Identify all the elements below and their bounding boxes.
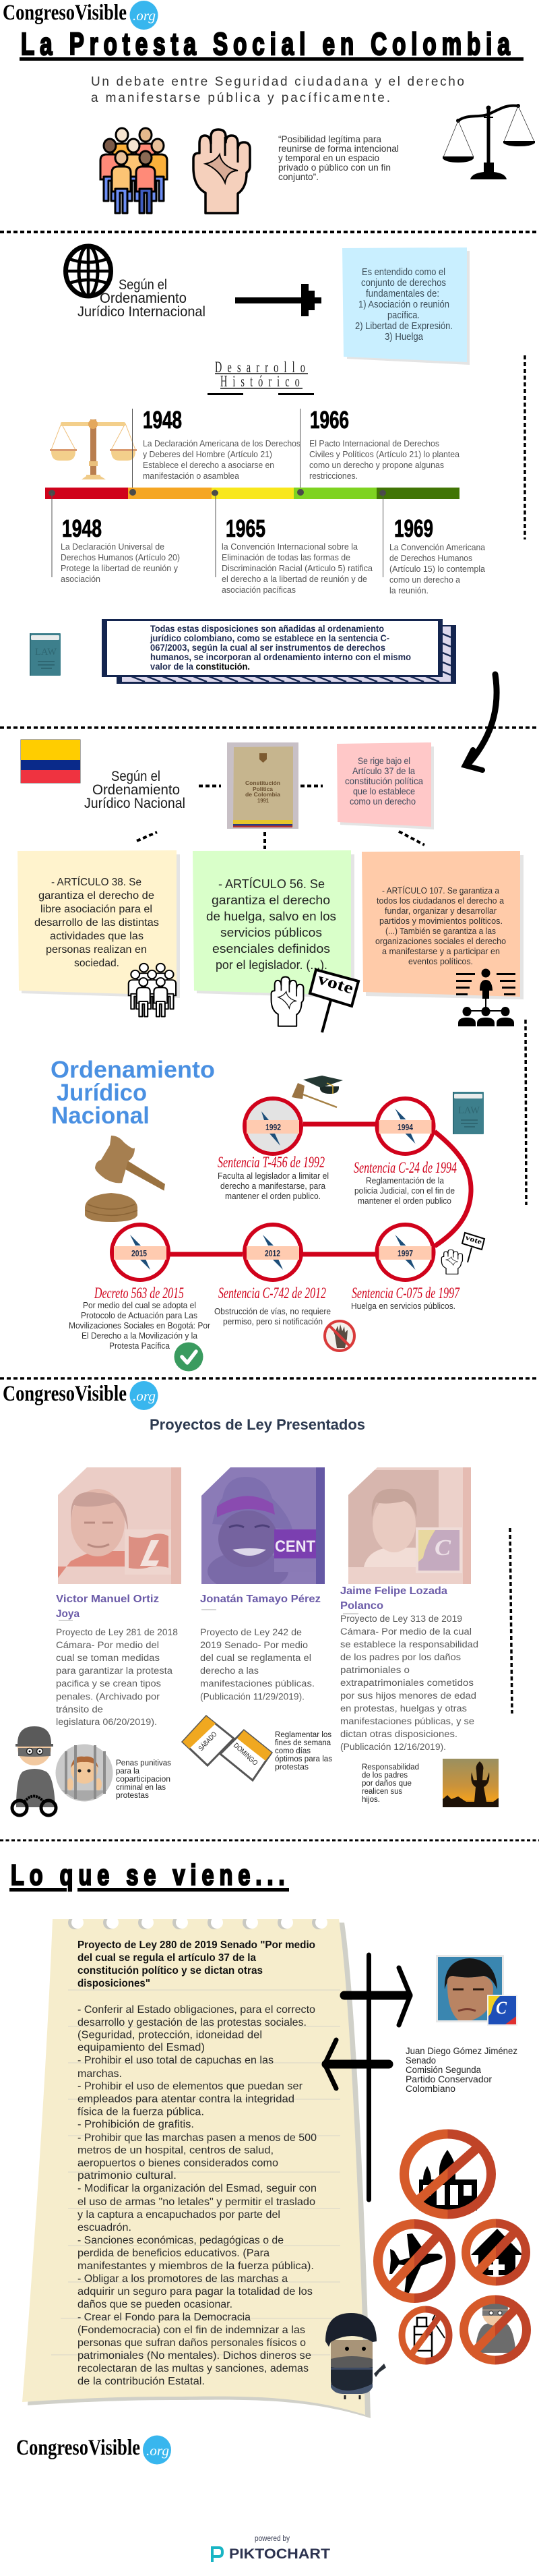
node 1994	[377, 1099, 434, 1154]
caption: responsabilidad padres	[362, 1763, 419, 1804]
heading: Desarrollo Histórico: Histórico	[220, 374, 300, 390]
note: artículo 56: por el legislador. (...).	[216, 958, 327, 972]
ruling C-24: Reglamentación de la	[366, 1176, 444, 1185]
timeline item 1966: 1966	[310, 406, 349, 434]
notepad: proyecto 280: empleados para atentar contra la integridad	[77, 2093, 294, 2105]
ruling T-456: derecho a manifestarse, para	[220, 1181, 325, 1191]
caption: responsabilidad padres: Responsabilidad	[362, 1763, 419, 1772]
logo: CongresoVisible bottom: .org	[146, 2444, 169, 2459]
node 2012	[245, 1225, 301, 1280]
legislator 3: Jaime Felipe Lozada	[340, 1585, 447, 1597]
note: artículo 38: - ARTÍCULO 38. Se	[51, 877, 141, 888]
quote text: y temporal en un espacio	[278, 152, 379, 163]
callout: constitutional block: valor de la constitución.	[150, 662, 250, 672]
photo: constitution book: Política	[253, 786, 273, 792]
icon: vote sign: vote	[315, 970, 356, 998]
note: artículo 38: garantiza el derecho de	[38, 890, 154, 902]
legislator 1	[56, 1593, 178, 1727]
arrow: curved arrow down	[465, 674, 497, 770]
note: artículo 38	[18, 850, 180, 998]
footer: powered by piktochart: PIKTOCHART	[229, 2546, 330, 2562]
notepad: proyecto 280: (Seguridad, protección, idoneidad del	[77, 2030, 262, 2041]
photo: constitution book: 1991	[257, 797, 269, 804]
logo: CongresoVisible top: .org	[133, 9, 156, 24]
timeline item 1969: de Derechos Humanos	[389, 554, 472, 563]
notepad: proyecto 280: personas que sufran daños personales físicos o	[77, 2337, 306, 2349]
timeline item 1948 declaracion universal: 1948	[62, 515, 102, 542]
timeline item 1969: la reunión.	[389, 586, 429, 595]
timeline item 1969: como un derecho a	[389, 575, 460, 585]
timeline item 1965: la Convención Internacional sobre la	[222, 542, 358, 552]
caption: fines de semana	[275, 1731, 332, 1772]
note: artículo 37: Se rige bajo el	[358, 755, 410, 766]
notepad: proyecto 280: daños que se pueden ocasionar.	[77, 2299, 232, 2310]
note: fundamental rights: 3) Huelga	[385, 332, 424, 343]
legislator 1: pacifica y se crean tipos	[56, 1678, 161, 1689]
notepad: proyecto 280: y la captura a encapuchados por parte del	[77, 2209, 280, 2221]
notepad: proyecto 280: perdida de beneficios educativos. (Para	[77, 2248, 270, 2259]
text: Juan Diego Gómez Jiménez: Juan Diego Gómez Jiménez	[406, 2046, 517, 2056]
icon: gold balance	[50, 419, 137, 479]
subtitle: Un debate entre Seguridad ciudadana y el derecho	[91, 75, 464, 89]
callout: constitutional block	[102, 619, 456, 684]
notepad: proyecto 280: - Obligar a los promotores de las marchas a	[77, 2273, 288, 2285]
heading: Según el Ordenamiento Jurídico Nacional: Jurídico Nacional	[84, 795, 185, 811]
note: artículo 56: esenciales definidos	[212, 941, 330, 956]
timeline item 1969: La Convención Americana	[389, 543, 485, 552]
ruling C-24: Sentencia C-24 de 1994	[354, 1159, 457, 1176]
icon: no spray	[402, 2309, 449, 2362]
heading: Lo que se viene: Lo que se viene...	[11, 1860, 284, 1892]
timeline item 1966: Civiles y Políticos (Artículo 21) lo plantea	[309, 450, 459, 459]
node 2015: 2015	[131, 1248, 147, 1258]
notepad: proyecto 280: patrimonio cultural.	[77, 2170, 177, 2182]
legislator 1: legislatura 06/20/2019).	[56, 1717, 157, 1727]
note: artículo 56	[193, 850, 354, 998]
icon: small vote sign	[462, 1233, 484, 1262]
notepad: proyecto 280: - Sanciones económicas, pedagógicas o de	[77, 2235, 284, 2246]
notepad: proyecto 280: constitución político y se dictan otras	[77, 1965, 263, 1977]
timeline item 1965: Discriminación Racial (Articulo 5) ratifica	[222, 564, 373, 573]
note: artículo 37: Artículo 37 de la	[352, 765, 415, 776]
decree 563	[69, 1285, 210, 1351]
text: Juan Diego Gómez Jiménez: Senado	[406, 2055, 436, 2066]
note: artículo 37: que lo establece	[353, 786, 415, 796]
node 1997	[377, 1225, 434, 1280]
photo: Jaime Felipe Lozada	[348, 1467, 471, 1584]
timeline item 1948 declaracion universal	[51, 493, 180, 584]
timeline item 1965: Eliminación de todas las formas de	[222, 553, 350, 562]
notepad: proyecto 280: metros de un hospital, centros de salud,	[77, 2144, 274, 2157]
legislator 1: Cámara- Por medio del	[56, 1640, 159, 1650]
notepad: proyecto 280: manifestantes y miembros de la fuerza pública).	[77, 2260, 314, 2272]
callout: constitutional block: jurídico colombiano, como se establece en la sentencia C-	[150, 633, 389, 643]
heading: Desarrollo Histórico	[208, 359, 314, 395]
notepad: proyecto 280: - Prohibición de grafitis.	[77, 2119, 194, 2130]
node 1997: 1997	[398, 1248, 413, 1258]
note: artículo 107: fundar, organizar y desarrollar	[385, 906, 497, 916]
timeline connectors	[169, 1124, 471, 1254]
timeline item 1948 declaracion americana	[132, 406, 300, 492]
timeline item 1965	[216, 493, 373, 595]
decree 563: Protesta Pacífica	[109, 1341, 170, 1351]
caption: penas punitivas: protestas	[116, 1792, 149, 1800]
subtitle	[91, 75, 464, 105]
heading: Según el Ordenamiento Jurídico Internacional	[77, 276, 205, 320]
note: artículo 38: actividades que las	[50, 931, 144, 942]
node 1994: 1994	[398, 1122, 414, 1132]
notepad: proyecto 280: - Prohibir el uso de elementos que puedan ser	[77, 2081, 303, 2092]
notepad: proyecto 280: patrimoniales (No mentales). Dichos dineros se	[77, 2350, 311, 2362]
node 1992	[245, 1099, 301, 1154]
caption: penas punitivas: para la	[116, 1767, 140, 1776]
icon: graduation cap and gavel	[292, 1076, 343, 1107]
note: artículo 107: todos los ciudadanos el derecho a	[377, 896, 504, 906]
legislator 3: en protestas, huelgas y otras	[340, 1703, 467, 1714]
notepad: proyecto 280: - Crear el Fondo para la Democracia	[77, 2312, 251, 2323]
caption: fines de semana: protestas	[275, 1763, 309, 1772]
heading: Según el Ordenamiento Jurídico Internacional: Según el	[119, 276, 167, 293]
icon: outline crowd	[129, 964, 176, 1017]
photo: Jonatán Tamayo: CENT	[275, 1538, 315, 1556]
note: artículo 107: (...) También se garantiza a las	[385, 927, 496, 936]
timeline item 1966: como un derecho y propone algunas	[309, 461, 444, 470]
callout: constitutional block: 067/2003, según la cual al ser instrumentos de derechos	[150, 643, 385, 653]
heading: Proyectos de Ley Presentados: Proyectos de Ley Presentados	[150, 1416, 365, 1433]
timeline item 1966	[300, 406, 459, 492]
note: artículo 107: partidos y movimientos políticos.	[379, 916, 503, 926]
legislator 1: penales. (Archivado por	[56, 1691, 160, 1702]
icon: globe	[66, 246, 110, 296]
node 2015	[112, 1225, 168, 1280]
subtitle: a manifestarse pública y pacíficamente.	[91, 91, 390, 105]
caption: responsabilidad padres: hijos.	[362, 1796, 380, 1804]
timeline item 1969: (Artículo 15) lo contempla	[389, 564, 485, 574]
icon: no hospitals	[466, 2223, 526, 2281]
text: Juan Diego Gómez Jiménez: Partido Conservador	[406, 2074, 493, 2084]
heading: Ordenamiento Jurídico Nacional: Ordenamiento	[51, 1057, 215, 1083]
arrow: signpost pointing both ways	[325, 1955, 410, 2200]
caption: penas punitivas	[116, 1759, 171, 1800]
icon: no mosque / heritage	[404, 2134, 491, 2215]
legislator 2: 2019 Senado- Por medio	[200, 1640, 308, 1650]
ruling C-742: permiso, pero si notificación	[223, 1317, 323, 1326]
note: artículo 56: - ARTÍCULO 56. Se	[218, 877, 325, 891]
title: La Protesta Social en Colombia	[21, 28, 510, 61]
notepad: proyecto 280: - Conferir al Estado obligaciones, para el correcto	[77, 2004, 315, 2016]
legislator 2: (Publicación 11/29/2019).	[200, 1691, 305, 1702]
icon: black scales of justice	[443, 104, 535, 179]
quote text: privado o público con un fin	[278, 162, 391, 173]
ruling C-24	[354, 1159, 457, 1206]
icon: raised fist	[193, 129, 250, 213]
notepad: proyecto 280: aeropuertos o bienes considerados como	[77, 2158, 278, 2169]
legislator 1: Victor Manuel Ortiz	[56, 1593, 159, 1605]
decree 563: Movilizaciones Sociales en Bogotá: Por	[69, 1321, 210, 1330]
heading: Según el Ordenamiento Jurídico Nacional: Según el	[111, 768, 160, 784]
footer: powered by piktochart	[212, 2535, 330, 2562]
caption: responsabilidad padres: realicen sus	[362, 1788, 402, 1796]
heading: Desarrollo Histórico: Desarrollo	[215, 359, 305, 376]
notepad: proyecto 280: - Prohibir que las marchas pasen a menos de 500	[77, 2132, 317, 2144]
note: artículo 56: de huelga, salvo en los	[206, 909, 336, 923]
heading: Según el Ordenamiento Jurídico Internacional: Jurídico Internacional	[77, 303, 205, 320]
icon: weekend calendars: SÁBADO	[197, 1730, 218, 1753]
timeline item 1948 declaracion universal: Derechos Humanos (Artículo 20)	[61, 553, 180, 562]
legislator 3: extrapatrimoniales cometidos	[340, 1678, 474, 1688]
icon: no airports	[378, 2224, 451, 2298]
icon: child behind bars	[55, 1744, 113, 1802]
photo: constitution book: Constitución	[245, 780, 280, 786]
legislator 3: Cámara- Por medio de la cual	[340, 1627, 472, 1637]
heading: Según el Ordenamiento Jurídico Internacional: Ordenamiento	[100, 290, 187, 306]
ruling C-24: policía Judicial, con el fin de	[354, 1186, 455, 1196]
logo: CongresoVisible middle: .org	[133, 1389, 156, 1404]
timeline item 1948 declaracion americana: manifestación o asamblea	[143, 471, 239, 481]
caption: penas punitivas: criminal en las	[116, 1784, 166, 1792]
timeline item 1948 declaracion americana: La Declaración Americana de los Derechos	[143, 439, 300, 448]
note: artículo 56: garantiza el derecho	[212, 893, 330, 907]
legislator 1: para garantizar la protesta	[56, 1666, 173, 1676]
heading: Ordenamiento Jurídico Nacional: Jurídico	[57, 1080, 147, 1106]
icon: riot police	[325, 2313, 386, 2399]
heading: Según el Ordenamiento Jurídico Nacional	[84, 768, 185, 811]
note: artículo 56: servicios públicos	[220, 925, 322, 939]
heading: Ordenamiento Jurídico Nacional	[51, 1057, 215, 1129]
ruling T-456: mantener el orden publico.	[225, 1192, 321, 1201]
photo: Juan Diego Gómez	[436, 1955, 517, 2026]
legislator 1: Joya	[56, 1608, 80, 1620]
photo: constitution book	[227, 742, 298, 829]
logo: CongresoVisible middle: CongresoVisible	[3, 1382, 127, 1406]
notepad: proyecto 280: de la contribución Estatal.	[77, 2376, 205, 2387]
icon: small fist	[441, 1250, 462, 1274]
caption: fines de semana: fines de semana	[275, 1739, 331, 1747]
callout: constitutional block: humanos, se incorporan al ordenamiento interno con el mismo	[150, 652, 411, 662]
caption: responsabilidad padres: de los padres	[362, 1772, 408, 1780]
heading: Ordenamiento Jurídico Nacional: Nacional	[51, 1103, 150, 1129]
decree 563: Por medio del cual se adopta el	[83, 1301, 196, 1310]
icon: colombian flag	[20, 739, 81, 784]
legislator 1: Proyecto de Ley 281 de 2018	[56, 1627, 178, 1637]
text: Juan Diego Gómez Jiménez: Comisión Segunda	[406, 2065, 481, 2075]
caption: penas punitivas: coparticipacion	[116, 1776, 170, 1784]
ruling C-24: mantener el orden publico	[358, 1196, 451, 1206]
text: Juan Diego Gómez Jiménez	[406, 2046, 517, 2094]
legislator 2: Proyecto de Ley 242 de	[200, 1627, 302, 1637]
caption: penas punitivas: Penas punitivas	[116, 1759, 171, 1767]
icon: big gavel	[85, 1136, 168, 1222]
icon: thief with handcuffs	[12, 1726, 56, 1815]
arrow: pixel arrow to note	[235, 284, 321, 316]
note: artículo 107	[362, 851, 524, 999]
timeline item 1948 declaracion americana: 1948	[143, 406, 182, 434]
note: artículo 107: organizaciones sociales el derecho	[375, 937, 506, 946]
timeline item 1948 declaracion universal: Protege la libertad de reunión y	[61, 564, 179, 573]
callout: constitutional block: Todas estas disposiciones son añadidas al ordenamiento	[150, 624, 384, 634]
legislator 3	[340, 1585, 478, 1752]
logo: CongresoVisible top: CongresoVisible	[3, 1, 127, 25]
notepad: proyecto 280: del cual se regula el artículo 37 de la	[77, 1952, 256, 1964]
text: Juan Diego Gómez Jiménez: Colombiano	[406, 2084, 455, 2094]
legislator 3: (Publicación 12/16/2019).	[340, 1742, 446, 1752]
timeline item 1965: asociación pacíficas	[222, 585, 296, 595]
notepad: proyecto 280: - Modificar la organización del Esmad, seguir con	[77, 2183, 317, 2194]
notepad: proyecto 280: física de la fuerza pública.	[77, 2107, 204, 2117]
photo: Jaime Felipe Lozada: C	[435, 1535, 451, 1560]
icon: crowd of people	[100, 128, 167, 213]
notepad: proyecto 280: adquirir un seguro para pagar la totalidad de los	[77, 2286, 313, 2297]
note: artículo 107: a manifestarse y a participar en	[382, 947, 500, 956]
icon: no hooded	[464, 2296, 527, 2360]
legislator 3: Proyecto de Ley 313 de 2019	[340, 1614, 462, 1624]
photo: Victor Manuel Ortiz	[58, 1467, 181, 1584]
timeline item 1965: 1965	[226, 515, 265, 542]
notepad: proyecto 280: (Fondemocracia) con el fin de indemnizar a las	[77, 2324, 305, 2336]
ruling C-742: Obstrucción de vías, no requiere	[214, 1307, 331, 1316]
ruling T-456: Sentencia T-456 de 1992	[218, 1154, 325, 1171]
legislator 2	[200, 1593, 321, 1702]
icon: law book small	[453, 1092, 484, 1134]
icon: weekend calendars: DOMINGO	[232, 1741, 259, 1767]
note: artículo 38: libre asociación para el	[40, 904, 152, 915]
notepad: proyecto 280: disposiciones"	[77, 1978, 150, 1989]
legislator 3: dictan otras disposiciones.	[340, 1729, 457, 1739]
decree 563: Protocolo de Actuación para Las	[81, 1311, 197, 1320]
legislator 2: derecho a las	[200, 1666, 259, 1676]
heading: Según el Ordenamiento Jurídico Nacional: Ordenamiento	[92, 782, 180, 798]
timeline item 1948 declaracion universal: La Declaración Universal de	[61, 542, 164, 552]
notepad: proyecto 280: equipamiento del Esmad)	[77, 2042, 205, 2053]
logo: CongresoVisible bottom: CongresoVisible	[16, 2436, 140, 2460]
ruling C-075	[351, 1285, 460, 1311]
node 1992: 1992	[265, 1122, 281, 1132]
note: fundamental rights: conjunto de derechos	[361, 278, 446, 289]
note: artículo 37: como un derecho	[350, 796, 416, 807]
note: artículo 38: sociedad.	[74, 958, 119, 969]
icon: weekend calendars	[183, 1716, 272, 1780]
legislator 2: manifestaciones públicas.	[200, 1678, 315, 1689]
note: artículo 107: eventos políticos.	[408, 957, 473, 966]
caption: fines de semana: como días	[275, 1747, 311, 1755]
icon: vote sign	[310, 970, 358, 1032]
icon: green check	[174, 1342, 203, 1372]
quote text: “Posibilidad legítima para	[278, 134, 381, 144]
ruling C-075: Huelga en servicios públicos.	[351, 1301, 455, 1311]
notepad: proyecto 280: desarrollo y gestación de las protestas sociales.	[77, 2017, 307, 2028]
timeline item 1969	[383, 493, 485, 595]
notepad: proyecto 280: - Prohibir el uso total de capuchas en las	[77, 2055, 274, 2066]
notepad: proyecto 280: recolectaran de las multas y sanciones, ademas	[77, 2363, 309, 2374]
note: fundamental rights: 2) Libertad de Expresión.	[355, 321, 453, 332]
photo: constitution book: de Colombia	[245, 791, 280, 798]
legislator 2: Jonatán Tamayo Pérez	[200, 1593, 321, 1605]
node 2012: 2012	[265, 1248, 280, 1258]
quote text: reunirse de forma intencional	[278, 143, 399, 154]
caption: responsabilidad padres: por daños que	[362, 1780, 412, 1788]
icon: forbidden hand	[325, 1321, 354, 1351]
legislator 3: se establece la responsabilidad	[340, 1639, 478, 1649]
legislator 1: cual se toman medidas	[56, 1653, 160, 1663]
note: artículo 37	[337, 742, 434, 829]
icon: small vote sign: vote	[464, 1233, 483, 1246]
icon: organization tree	[456, 968, 515, 1026]
icon: outline fist	[272, 977, 303, 1026]
footer: powered by piktochart: powered by	[255, 2535, 290, 2543]
note: artículo 37: constitución política	[345, 775, 423, 786]
note: fundamental rights	[342, 247, 470, 365]
timeline item 1948 declaracion universal: asociación	[61, 575, 100, 584]
notepad: proyecto 280: Proyecto de Ley 280 de 2019 Senado "Por medio	[77, 1939, 315, 1951]
note: fundamental rights: Es entendido como el	[362, 267, 445, 278]
note: artículo 38: desarrollo de las distintas	[34, 917, 159, 929]
legislator 2: del cual se reglamenta el	[200, 1653, 311, 1663]
note: fundamental rights: pacífica.	[387, 310, 420, 321]
timeline item 1966: El Pacto Internacional de Derechos	[309, 439, 439, 448]
note: fundamental rights: 1) Asociación o reunión	[358, 299, 449, 310]
note: fundamental rights: fundamentales de:	[366, 289, 439, 299]
caption: fines de semana: Reglamentar los	[275, 1731, 331, 1739]
timeline item 1948 declaracion americana: Establece el derecho a asociarse en	[143, 461, 274, 470]
timeline item 1965: el derecho a la libertad de reunión y de	[222, 575, 367, 584]
legislator 3: de los padres por los daños	[340, 1652, 461, 1662]
legislator 3: por sus hijos menores de edad	[340, 1691, 476, 1701]
notepad: proyecto 280: el uso de armas "no letales" y permitir el traslado	[77, 2196, 315, 2208]
notepad: proyecto 280: escuadrón.	[77, 2222, 131, 2233]
timeline bar	[45, 488, 459, 499]
note: artículo 107: - ARTÍCULO 107. Se garantiza a	[382, 885, 499, 896]
ruling C-742	[214, 1285, 331, 1326]
notepad: proyecto 280: marchas.	[77, 2068, 122, 2080]
legislator 3: manifestaciones públicas, y se	[340, 1716, 474, 1726]
decree 563: El Derecho a la Movilización y la	[82, 1331, 197, 1341]
photo: Juan Diego Gómez: C	[496, 1998, 507, 2018]
timeline item 1948 declaracion americana: y Deberes del Hombre (Artículo 21)	[143, 450, 272, 459]
photo: sunset silhouette	[443, 1759, 499, 1807]
photo: Jonatán Tamayo	[201, 1467, 325, 1591]
legislator 3: patrimoniales o	[340, 1665, 410, 1675]
legislator 1: tránsito de	[56, 1705, 103, 1714]
timeline item 1966: restricciones.	[309, 471, 358, 481]
caption: fines de semana: óptimos para las	[275, 1755, 332, 1763]
ruling C-742: Sentencia C-742 de 2012	[218, 1285, 326, 1301]
timeline item 1969: 1969	[394, 515, 433, 542]
ruling T-456	[218, 1154, 329, 1201]
quote text	[278, 134, 399, 182]
ruling T-456: Faculta al legislador a limitar el	[218, 1171, 329, 1181]
decree 563: Decreto 563 de 2015	[94, 1285, 184, 1301]
notepad: proyecto 280	[22, 1912, 371, 2418]
note: artículo 38: personas realizan en	[46, 944, 147, 956]
legislator 3: Polanco	[340, 1600, 383, 1612]
quote text: conjunto”.	[278, 171, 319, 182]
icon: law book	[30, 633, 61, 676]
ruling C-075: Sentencia C-075 de 1997	[352, 1285, 460, 1301]
